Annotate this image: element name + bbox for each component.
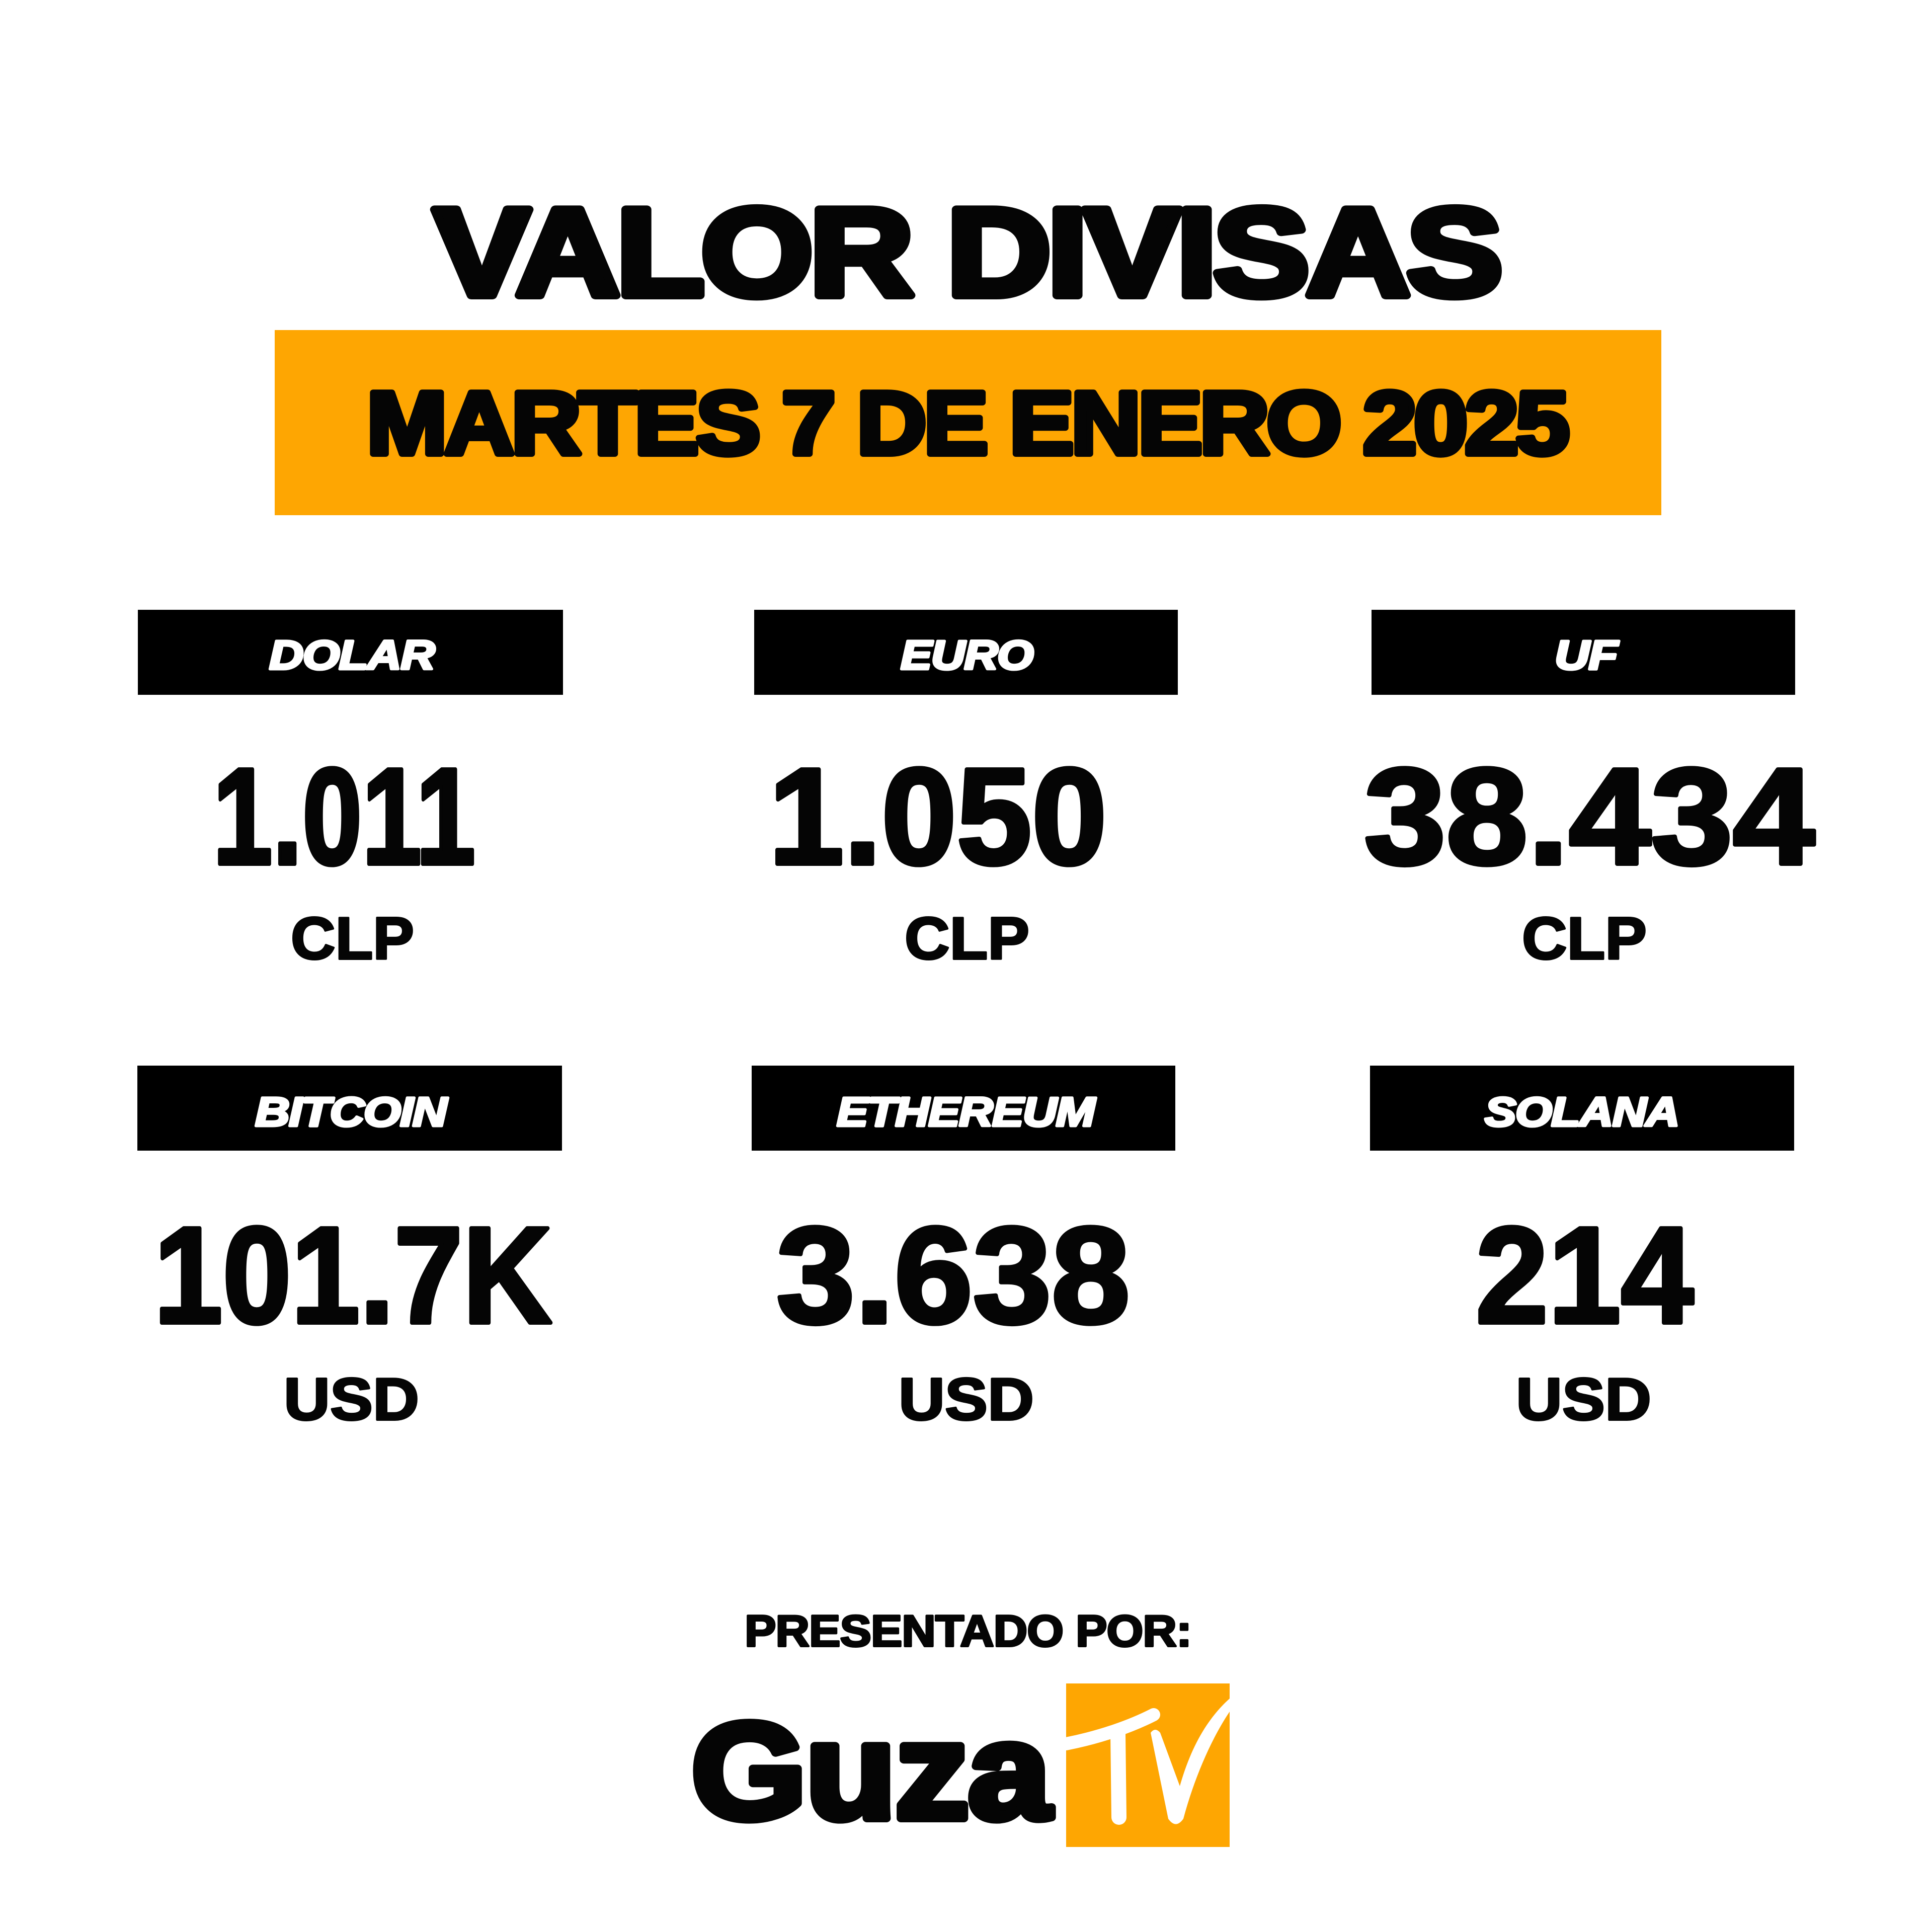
panel: ethereum xyxy=(752,1066,1175,1433)
panel: bitcoin: 101.7K xyxy=(154,1198,552,1352)
panel: uf: 38.434 xyxy=(1364,740,1816,893)
panel: uf: UF xyxy=(1555,632,1619,678)
panel: ethereum: ETHEREUM xyxy=(837,1089,1096,1135)
panel: dolar xyxy=(138,610,563,972)
panel: euro: EURO xyxy=(901,632,1033,678)
panel: euro: CLP xyxy=(905,905,1029,972)
icon: TV square xyxy=(1066,1683,1230,1847)
panel: bitcoin: BITCOIN xyxy=(255,1089,448,1135)
panel: dolar: CLP xyxy=(291,905,414,972)
panel: solana: SOLANA xyxy=(1485,1089,1679,1135)
panel: bitcoin: USD xyxy=(284,1366,419,1433)
panel: solana: USD xyxy=(1516,1366,1651,1433)
panel: dolar: DOLAR xyxy=(269,632,435,678)
sponsor heading: PRESENTADO POR: xyxy=(745,1606,1191,1656)
panel: uf xyxy=(1364,610,1816,972)
panel: bitcoin xyxy=(137,1066,562,1433)
logo: Guza TV xyxy=(691,1683,1230,1847)
panel: euro: 1.050 xyxy=(769,740,1107,893)
date banner: MARTES 7 DE ENERO 2025 xyxy=(367,373,1567,473)
panel: uf: CLP xyxy=(1522,905,1647,972)
panel: dolar: 1.011 xyxy=(213,740,475,893)
title: VALOR DIVISAS xyxy=(434,182,1499,322)
panel: solana: 214 xyxy=(1476,1198,1695,1352)
logo: Guza TV: Guza xyxy=(691,1695,1052,1847)
panel: ethereum: USD xyxy=(899,1366,1034,1433)
panel: euro xyxy=(754,610,1178,972)
panel: solana xyxy=(1370,1066,1794,1433)
panel: ethereum: 3.638 xyxy=(776,1198,1130,1352)
date banner xyxy=(275,330,1661,515)
